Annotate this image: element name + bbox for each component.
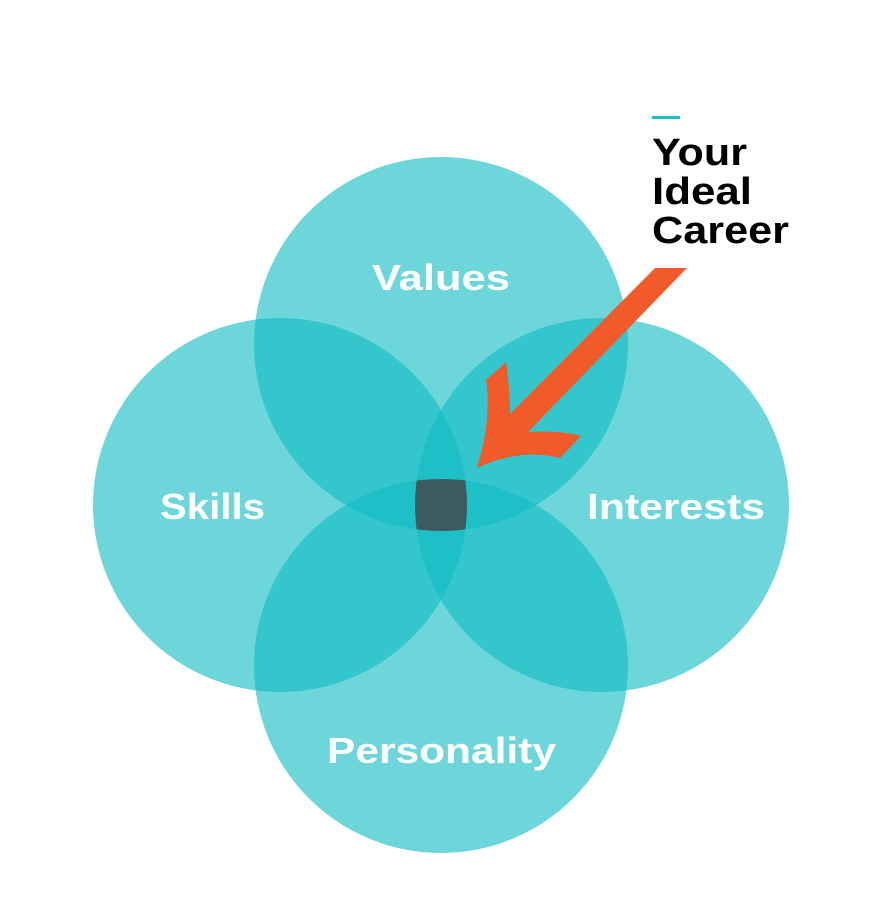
callout: your ideal career: Your — [652, 132, 747, 174]
label: personality: Personality — [327, 730, 556, 771]
label: values: Values — [372, 257, 510, 298]
callout: your ideal career: Career — [652, 210, 789, 252]
circle: personality — [254, 479, 628, 853]
circle: skills — [93, 318, 467, 692]
label: interests: Interests — [587, 486, 765, 527]
circle: values — [254, 157, 628, 531]
callout: your ideal career — [652, 116, 789, 252]
venn diagram — [93, 157, 789, 853]
callout: your ideal career: Ideal — [652, 171, 752, 213]
center intersection — [415, 479, 467, 531]
arrow — [477, 268, 687, 468]
circle: interests — [415, 318, 789, 692]
label: skills: Skills — [160, 486, 265, 527]
